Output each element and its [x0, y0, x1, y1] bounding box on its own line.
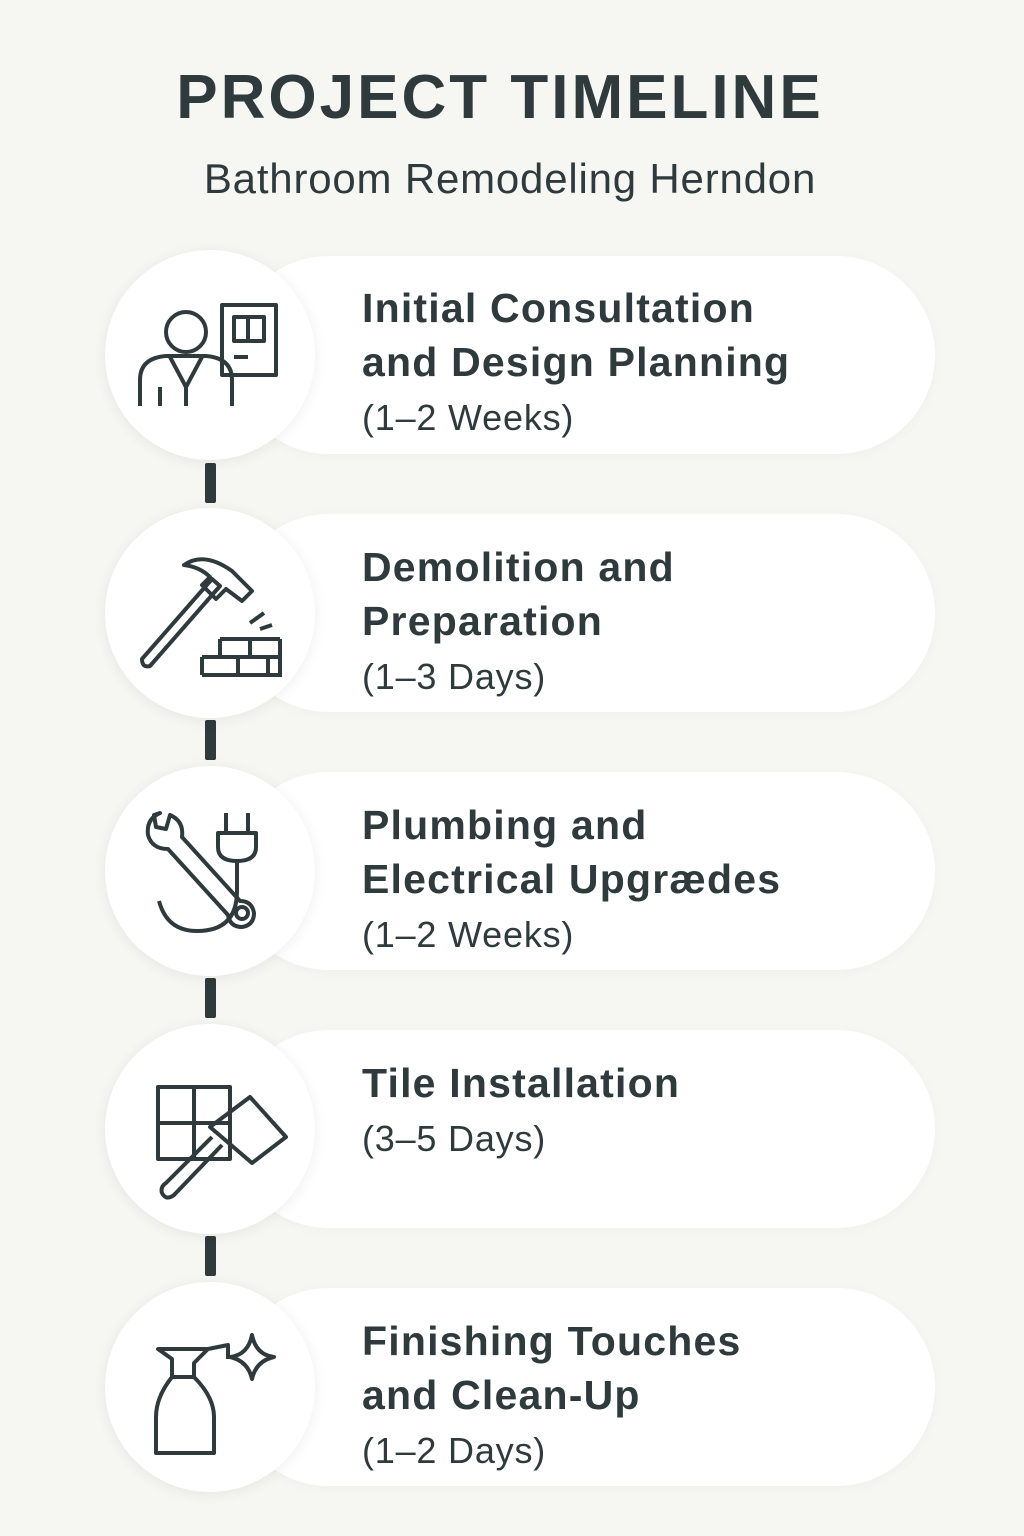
- subtitle: Bathroom Remodeling Herndon: [204, 155, 816, 202]
- step 5 text: (1–2 Days): [362, 1430, 546, 1471]
- step 4 text: (3–5 Days): [362, 1118, 546, 1159]
- step 3 card: [230, 772, 935, 970]
- step 4 card: [230, 1030, 935, 1228]
- step 1 text: Initial Consultation: [362, 285, 755, 331]
- step 5 text: [362, 1318, 742, 1471]
- step 3 icon: wrench and plug: [105, 766, 315, 976]
- step 4 text: [362, 1060, 680, 1159]
- step 5 icon: spray bottle and sparkle: [105, 1282, 315, 1492]
- step 3 text: [362, 802, 781, 955]
- step 2 text: [362, 544, 675, 697]
- step 4 icon: tiles and trowel: [105, 1024, 315, 1234]
- connector 1: [205, 463, 216, 503]
- step 3 text: Electrical Upgrædes: [362, 856, 781, 902]
- step 1 text: (1–2 Weeks): [362, 397, 574, 438]
- title: PROJECT TIMELINE: [176, 63, 824, 132]
- step 3 text: (1–2 Weeks): [362, 914, 574, 955]
- step 2 text: Demolition and: [362, 544, 675, 590]
- step 2 text: Preparation: [362, 598, 603, 644]
- step 1 text: [362, 285, 790, 438]
- step 5 card: [230, 1288, 935, 1486]
- step 1 card: [230, 256, 935, 454]
- connector 2: [205, 720, 216, 760]
- step 2 card: [230, 514, 935, 712]
- step 5 text: and Clean-Up: [362, 1372, 641, 1418]
- connector 3: [205, 978, 216, 1018]
- connector 4: [205, 1236, 216, 1276]
- step 1 text: and Design Planning: [362, 339, 790, 385]
- step 2 icon: hammer and bricks: [105, 508, 315, 718]
- step 1 icon: consultant with plan: [105, 250, 315, 460]
- step 3 text: Plumbing and: [362, 802, 647, 848]
- step 4 text: Tile Installation: [362, 1060, 680, 1106]
- step 5 text: Finishing Touches: [362, 1318, 742, 1364]
- step 2 text: (1–3 Days): [362, 656, 546, 697]
